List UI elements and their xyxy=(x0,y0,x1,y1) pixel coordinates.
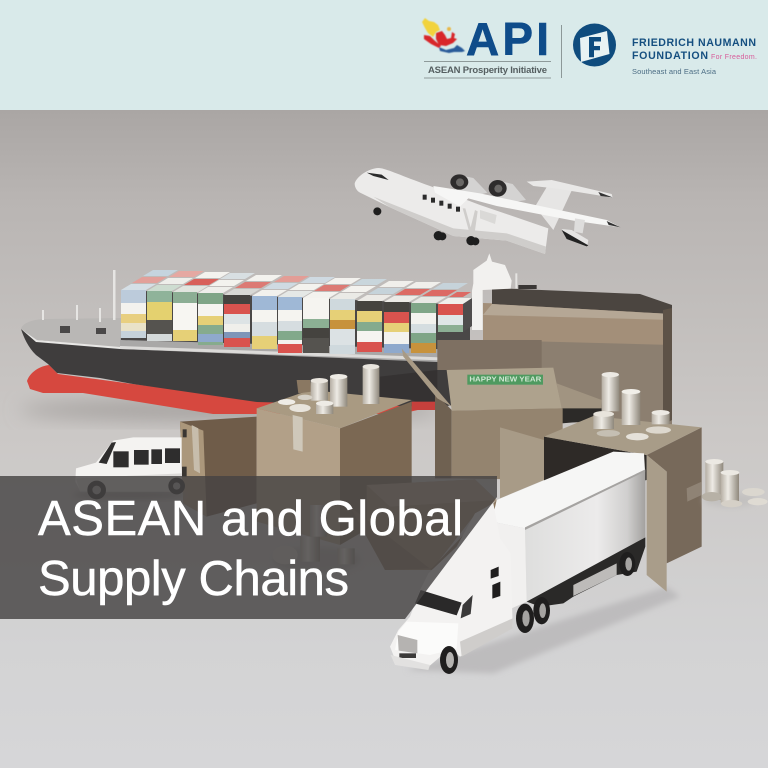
landing gear xyxy=(463,208,478,237)
side panel xyxy=(435,393,452,478)
title xyxy=(38,492,463,606)
coin stacks on open box xyxy=(593,372,671,440)
dark shadow behind flap xyxy=(380,370,437,410)
container stacks xyxy=(121,270,473,354)
trailer side xyxy=(525,471,645,602)
bumper xyxy=(391,655,430,670)
hood xyxy=(395,622,458,655)
tail fin xyxy=(535,182,572,230)
trailer top xyxy=(492,452,645,528)
tagline: ASEAN Prosperity Initiative xyxy=(428,65,547,76)
trailer front xyxy=(492,522,527,608)
sleeper windows xyxy=(491,567,500,599)
stack shadow base xyxy=(121,290,470,350)
title line 1: ASEAN and Global xyxy=(38,492,463,546)
box interior xyxy=(544,437,647,507)
cargo box: left front box xyxy=(180,417,257,517)
front wheel xyxy=(440,646,458,674)
main wing xyxy=(433,186,621,227)
rule below tagline xyxy=(424,78,551,79)
cargo box: front low box xyxy=(350,479,497,570)
label xyxy=(467,375,543,385)
cab body xyxy=(390,503,513,668)
cargo box: large back box xyxy=(483,288,672,425)
grille xyxy=(398,635,417,653)
engine one xyxy=(450,174,487,197)
foundation name: FRIEDRICH NAUMANN xyxy=(632,37,756,49)
icon: ASEAN map xyxy=(422,18,465,53)
bow deck xyxy=(21,318,122,348)
truck and open box xyxy=(390,416,702,674)
logo: Friedrich Naumann Foundation xyxy=(573,24,757,76)
right back flap xyxy=(557,383,602,410)
rear wheel xyxy=(619,552,635,576)
windshield xyxy=(415,590,462,615)
undercarriage xyxy=(527,537,645,607)
box door flap xyxy=(647,455,667,592)
flap xyxy=(480,210,497,224)
box tape xyxy=(687,482,702,502)
belly shade xyxy=(373,197,546,254)
header strip xyxy=(0,0,768,110)
floor shadow xyxy=(407,587,680,673)
left flap xyxy=(402,348,452,407)
wing float xyxy=(574,218,585,233)
back box behind xyxy=(437,340,542,370)
box left flap xyxy=(500,427,544,498)
region: Southeast and East Asia xyxy=(632,67,717,76)
cargo box: happy new year box xyxy=(380,340,602,480)
cabin windows xyxy=(423,195,460,212)
drive wheels xyxy=(516,604,534,633)
fuselage xyxy=(355,168,548,254)
tailplane xyxy=(527,180,613,198)
front panel xyxy=(452,408,563,480)
deck rail xyxy=(21,329,120,349)
slogan: For Freedom. xyxy=(711,54,757,61)
deck equipment xyxy=(42,270,116,322)
coin stacks on tall box xyxy=(278,364,379,414)
coins on the floor xyxy=(272,505,360,573)
hull shadow xyxy=(20,398,440,422)
coin stacks on floor right xyxy=(702,459,768,507)
side window xyxy=(461,595,473,618)
divider between logos xyxy=(561,25,562,78)
inner flap xyxy=(447,368,562,411)
red lower hull xyxy=(27,365,440,414)
bridge superstructure xyxy=(472,253,537,330)
container ship xyxy=(20,270,486,422)
engine two xyxy=(489,180,526,203)
cargo box: tall box with coins xyxy=(257,380,412,545)
title band xyxy=(0,476,497,619)
title line 2: Supply Chains xyxy=(38,552,349,606)
box right side xyxy=(647,427,702,563)
icon: F roundel xyxy=(573,24,616,66)
van xyxy=(73,437,187,500)
cab step xyxy=(460,618,513,657)
API wordmark: API xyxy=(466,13,549,65)
rule above tagline xyxy=(424,61,551,62)
airplane xyxy=(355,168,621,254)
lower deck strip xyxy=(120,338,486,364)
logo: ASEAN Prosperity Initiative xyxy=(422,13,551,78)
foundation name line 2: FOUNDATION xyxy=(632,50,708,62)
box top xyxy=(544,416,702,455)
dark hull xyxy=(21,329,486,407)
label: HAPPY NEW YEAR xyxy=(469,377,541,384)
cockpit window xyxy=(367,173,389,180)
